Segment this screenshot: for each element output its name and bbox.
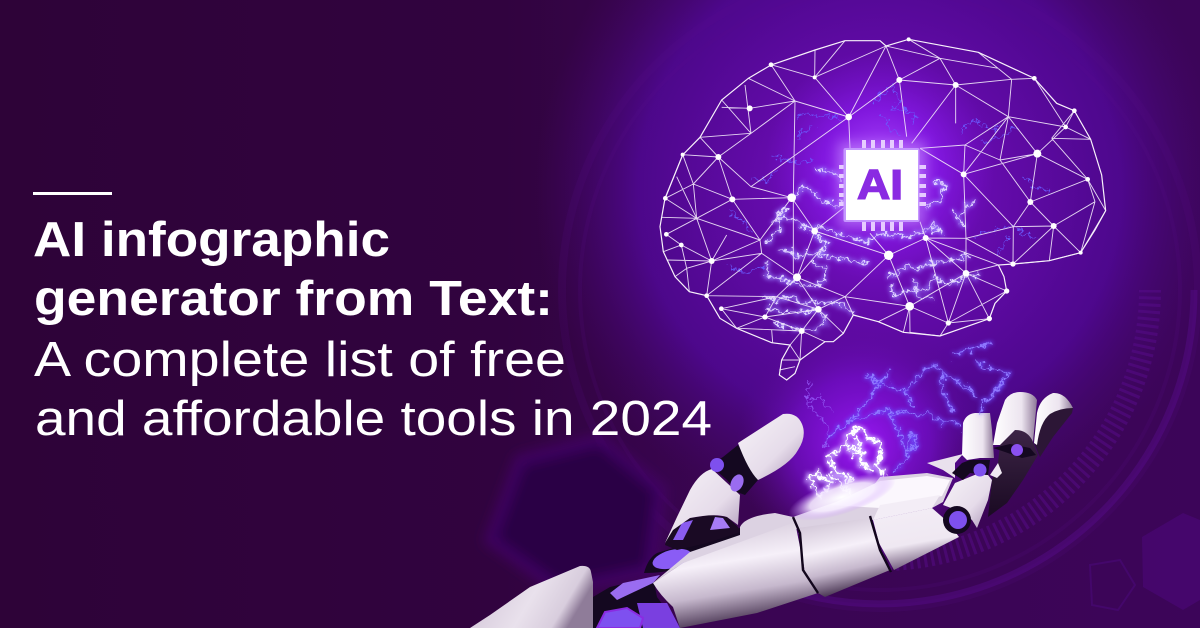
palm band	[873, 495, 940, 520]
brain outline	[660, 39, 1106, 380]
faint rings	[562, 0, 1198, 608]
title line 1: AI infographic	[33, 213, 390, 267]
thumb base	[644, 528, 740, 573]
forearm shell	[470, 566, 593, 628]
brain core glow	[765, 50, 995, 280]
finger one upper	[962, 413, 994, 460]
finger three	[1034, 393, 1073, 457]
subtitle line 1: A complete list of free	[34, 333, 566, 387]
hand spark	[783, 464, 901, 530]
shadow finger patch	[990, 463, 1002, 478]
thumb middle segment	[665, 469, 740, 543]
chip pins	[839, 140, 926, 231]
palm segment three	[873, 508, 959, 570]
thumb band	[665, 515, 740, 550]
brain mesh	[662, 39, 1106, 370]
palm	[653, 473, 953, 583]
chip halo	[838, 142, 926, 228]
hand lightning	[807, 343, 1008, 497]
palm seams	[793, 516, 891, 593]
finger two joint	[993, 444, 1036, 458]
chip body	[844, 148, 920, 222]
palm segment one	[653, 522, 818, 628]
faint hexagons	[490, 440, 660, 590]
finger two	[993, 392, 1037, 445]
robot hand	[470, 343, 1073, 628]
brain	[660, 37, 1106, 380]
palm segment two	[798, 518, 890, 597]
finger one joint	[952, 460, 990, 480]
title	[33, 213, 712, 446]
thumb tip	[738, 414, 804, 480]
brain nodes	[663, 37, 1090, 334]
finger one knuckle	[943, 506, 971, 534]
wrist joint	[593, 575, 680, 628]
palm highlight	[830, 476, 950, 508]
lightning inside brain	[730, 87, 1053, 332]
thumb joint	[710, 445, 758, 495]
chip label: AI	[857, 161, 903, 208]
accent rule	[33, 192, 112, 195]
title line 2: generator from Text:	[34, 272, 553, 326]
finger one lower	[943, 474, 992, 528]
subtitle line 2: and affordable tools in 2024	[35, 392, 712, 446]
icon: AI chip	[838, 140, 926, 231]
back fingers shadow	[988, 430, 1038, 517]
palm sheet	[927, 454, 963, 478]
